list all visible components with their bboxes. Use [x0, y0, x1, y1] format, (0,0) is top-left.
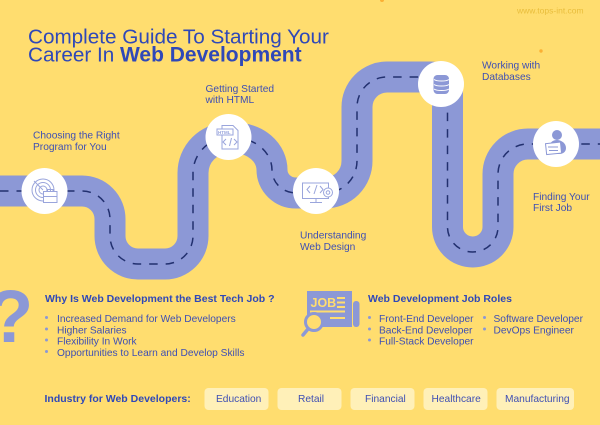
- job roles list: Front-End Developer: [379, 314, 474, 325]
- step 5 label: First Job: [533, 203, 572, 214]
- icon: database: [434, 75, 449, 94]
- chip: manufacturing: Manufacturing: [505, 394, 570, 405]
- step 2 label: Getting Started: [206, 84, 274, 95]
- panel: why web development: [45, 293, 274, 359]
- why heading: Why Is Web Development the Best Tech Job ?: [45, 293, 274, 305]
- chip: manufacturing: [496, 388, 574, 410]
- panel: industry: [44, 388, 574, 410]
- step 1 label: Program for You: [33, 142, 107, 153]
- job roles list: Back-End Developer: [379, 326, 473, 336]
- step 3: understanding web design: [293, 168, 367, 253]
- icon: monitor with code and gear: [302, 183, 332, 202]
- step 2: getting started with html: [204, 84, 274, 160]
- chip: education: Education: [216, 394, 261, 405]
- title: Complete Guide To Starting Your: [28, 26, 329, 48]
- job roles list: [368, 314, 584, 348]
- industry heading: Industry for Web Developers:: [44, 393, 191, 405]
- job roles list: Software Developer: [494, 314, 584, 325]
- decorative dot right: [539, 49, 543, 53]
- why list: Opportunities to Learn and Develop Skills: [57, 348, 244, 359]
- chip: financial: [350, 388, 414, 410]
- decorative dot top: [380, 0, 384, 2]
- chip: retail: Retail: [298, 394, 324, 405]
- why list: Increased Demand for Web Developers: [57, 314, 236, 325]
- title: [28, 26, 329, 66]
- title: Career In Web Development: [28, 44, 302, 66]
- job roles list: Full-Stack Developer: [379, 336, 474, 348]
- icon: job search: [303, 291, 360, 335]
- why list: Higher Salaries: [57, 326, 127, 336]
- website url: www.tops-int.com: [516, 6, 584, 16]
- icon: target and briefcase: [32, 179, 57, 202]
- chip: retail: [278, 388, 342, 410]
- job roles heading: Web Development Job Roles: [368, 293, 512, 305]
- icon: job search: JOB: [310, 296, 336, 310]
- step 4 label: Databases: [482, 72, 531, 83]
- chip: financial: Financial: [365, 394, 406, 405]
- chip: healthcare: [424, 388, 488, 410]
- step 4: working with databases: [418, 60, 540, 107]
- step 5 label: Finding Your: [533, 192, 590, 203]
- icon: html file: HTML: [218, 130, 231, 135]
- why list: Flexibility In Work: [57, 336, 138, 348]
- chip: healthcare: Healthcare: [432, 394, 481, 405]
- job roles list: DevOps Engineer: [494, 326, 575, 336]
- step 1 label: Choosing the Right: [33, 130, 120, 142]
- why list: [45, 314, 244, 359]
- step 4 label: Working with: [482, 60, 540, 72]
- step 2 label: with HTML: [204, 95, 255, 106]
- winding road: [0, 77, 600, 264]
- icon: person holding resume: [546, 130, 566, 155]
- step 5: finding first job: [533, 121, 590, 214]
- panel: job roles: [368, 293, 584, 348]
- step 1: choosing program: [22, 130, 120, 214]
- chip: education: [204, 388, 268, 410]
- step 3 label: Web Design: [300, 242, 355, 253]
- step 3 label: Understanding: [300, 230, 367, 242]
